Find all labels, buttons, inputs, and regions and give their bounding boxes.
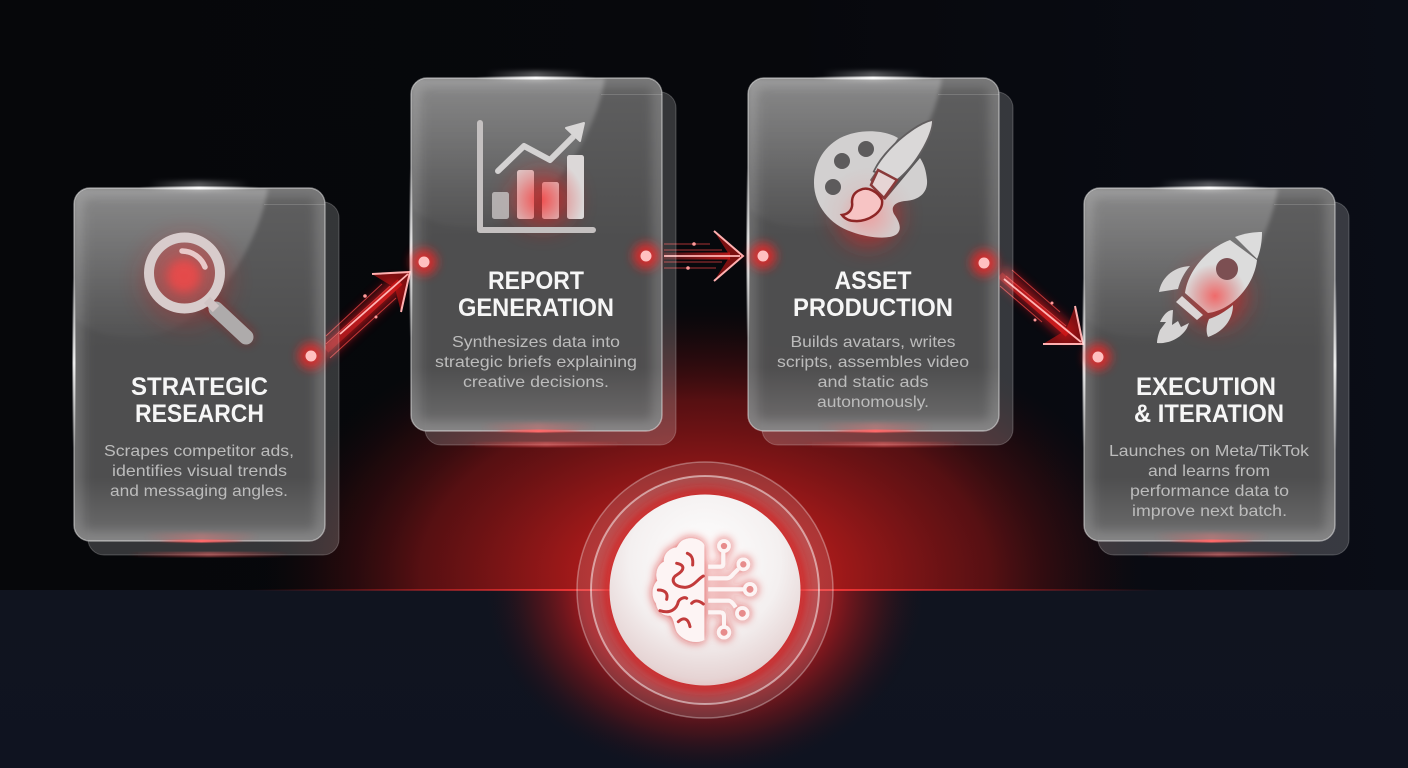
text: asset production description: Builds avatars, writes — [790, 334, 956, 351]
icon: brain and circuit — [653, 538, 755, 642]
heading: strategic research — [131, 373, 268, 428]
heading: execution and iteration: & ITERATION — [1134, 400, 1284, 428]
text: execution and iteration description: and learns from — [1148, 463, 1270, 480]
text: report generation description: strategic briefs explaining — [435, 354, 637, 371]
text: asset production description — [777, 334, 969, 411]
text: strategic research description: and messaging angles. — [110, 483, 288, 500]
heading: report generation — [458, 267, 614, 322]
text: execution and iteration description: improve next batch. — [1132, 503, 1287, 520]
text: asset production description: autonomously. — [817, 394, 929, 411]
icon: magnifying glass — [142, 236, 246, 337]
heading: report generation: REPORT — [488, 267, 584, 295]
text: strategic research description: Scrapes competitor ads, — [104, 443, 294, 460]
red core glow — [264, 325, 1145, 760]
heading: execution and iteration — [1134, 373, 1284, 428]
heading: execution and iteration: EXECUTION — [1136, 373, 1276, 401]
text: strategic research description: identifies visual trends — [112, 463, 287, 480]
AI core hub — [577, 462, 833, 718]
outer glass ring — [577, 462, 833, 718]
arrow: report to asset — [664, 231, 743, 281]
text: execution and iteration description: Launches on Meta/TikTok — [1109, 443, 1310, 460]
heading: asset production: PRODUCTION — [793, 294, 953, 322]
text: asset production description: scripts, assembles video — [777, 354, 969, 371]
text: report generation description: Synthesizes data into — [452, 334, 620, 351]
heading: strategic research: STRATEGIC — [131, 373, 268, 401]
heading: asset production: ASSET — [834, 267, 912, 295]
icon: palette and brush — [814, 121, 932, 245]
panel: report generation — [410, 71, 676, 446]
panel: strategic research — [72, 181, 339, 556]
text: report generation description — [435, 334, 637, 391]
arrow: research to report — [324, 272, 410, 358]
connector dots — [298, 243, 1111, 370]
text: strategic research description — [104, 443, 294, 500]
white disc — [610, 494, 800, 686]
icon: rocket — [1157, 232, 1262, 343]
inner glass ring — [591, 476, 819, 704]
text: asset production description: and static ads — [818, 374, 928, 391]
panel: execution and iteration — [1082, 181, 1349, 556]
icon: bar chart with arrow — [480, 123, 593, 230]
heading: strategic research: RESEARCH — [135, 400, 264, 428]
text: execution and iteration description: performance data to — [1130, 483, 1289, 500]
text: report generation description: creative decisions. — [463, 374, 609, 391]
panel: asset production — [746, 71, 1013, 446]
text: execution and iteration description — [1109, 443, 1310, 520]
arrow: asset to execution — [1000, 270, 1083, 344]
heading: asset production — [793, 267, 953, 322]
heading: report generation: GENERATION — [458, 294, 614, 322]
